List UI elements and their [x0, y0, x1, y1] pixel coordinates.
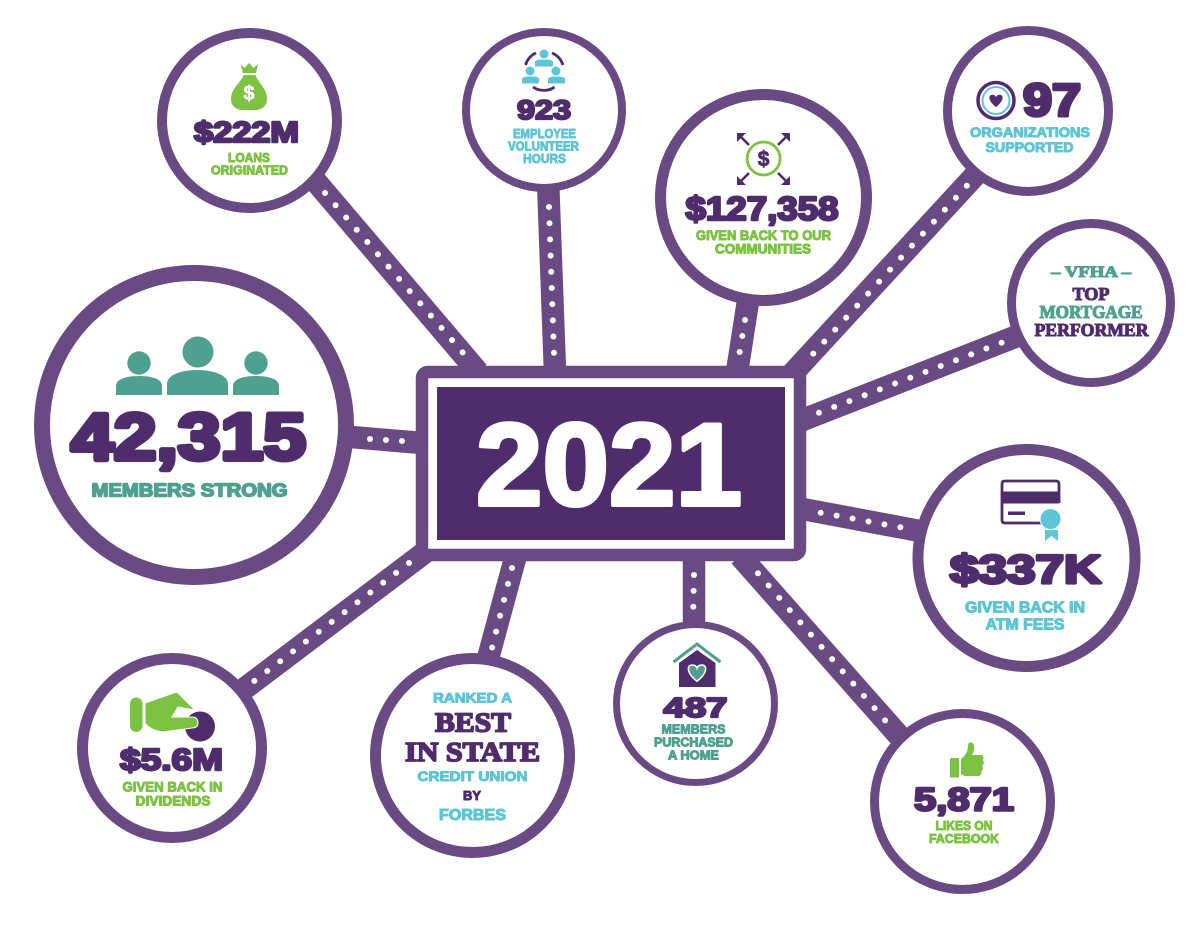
stat label: DIVIDENDS — [136, 794, 210, 808]
icon: dollar with arrows: $ — [758, 148, 770, 171]
connector: forbes — [487, 555, 516, 662]
connector: members — [345, 436, 422, 443]
stat label: A HOME — [668, 748, 719, 762]
icon: dollar with arrows — [0, 0, 790, 185]
icon: people circle — [522, 50, 565, 90]
stat label: LIKES ON — [936, 818, 992, 833]
stat number: 42,315 — [71, 400, 306, 474]
connector: facebook — [740, 556, 908, 746]
icon: card with ribbon — [1002, 481, 1061, 541]
award text: IN STATE — [405, 737, 540, 767]
stat label — [508, 127, 579, 166]
panel: given back to communities — [0, 0, 866, 300]
stat label: COMMUNITIES — [715, 242, 811, 256]
award text — [405, 690, 540, 824]
central year panel — [422, 372, 800, 555]
award text — [1034, 264, 1149, 340]
stat number: $5.6M — [120, 742, 223, 777]
icon: house with heart — [674, 644, 720, 687]
stat label: MEMBERS — [662, 722, 726, 736]
stat number: $127,358 — [686, 190, 838, 227]
icon: money bag: $ — [243, 83, 255, 105]
award text: CREDIT UNION — [418, 768, 528, 784]
stat label — [122, 780, 222, 808]
award text: BEST — [435, 708, 511, 738]
panel: dividends — [82, 658, 262, 838]
panel: vfha top mortgage performer — [1012, 224, 1170, 382]
stat label: ORIGINATED — [211, 162, 288, 178]
award text: MORTGAGE — [1040, 302, 1142, 322]
connector: volunteer hours — [548, 180, 555, 372]
panel: best in state — [376, 658, 570, 852]
stat label — [929, 818, 1000, 846]
panel: members purchased a home — [616, 624, 774, 782]
stat label: SUPPORTED — [986, 139, 1074, 155]
stat label: VOLUNTEER — [508, 140, 579, 154]
award text: BY — [463, 788, 481, 803]
stat label: GIVEN BACK IN — [122, 780, 222, 794]
panel: loans originated — [162, 33, 337, 208]
stat label — [965, 600, 1085, 634]
stat label: GIVEN BACK TO OUR — [696, 228, 831, 243]
stat number: 5,871 — [914, 782, 1014, 818]
award text: RANKED A — [433, 690, 512, 706]
stat number: 97 — [1023, 74, 1081, 126]
stat label — [211, 150, 288, 178]
stat label: EMPLOYEE — [513, 127, 576, 141]
stat number: $222M — [194, 117, 299, 149]
connector: home — [682, 555, 705, 630]
stat label: FACEBOOK — [929, 831, 1000, 846]
stat number: $337K — [950, 548, 1101, 592]
icon: hand with coin — [130, 692, 215, 742]
award text: FORBES — [439, 807, 506, 824]
stat label: MEMBERS STRONG — [92, 480, 288, 500]
connector: dividends — [240, 550, 428, 692]
connector: vfha — [800, 333, 1025, 421]
connector: loans — [312, 177, 478, 372]
stat label — [696, 228, 831, 256]
panel: members strong — [42, 273, 346, 577]
icon: money bag — [231, 63, 267, 110]
stat number: 923 — [517, 95, 571, 125]
connector: given back — [737, 295, 749, 372]
award text: – VFHA – — [1050, 264, 1132, 281]
stat number: 487 — [664, 692, 728, 723]
stat label — [654, 722, 733, 762]
panel: likes on facebook — [874, 714, 1050, 890]
stat label: PURCHASED — [654, 734, 733, 750]
connector: atm fees — [800, 508, 925, 532]
award text: PERFORMER — [1034, 320, 1149, 340]
icon: heart badge — [978, 82, 1014, 118]
stat label: ATM FEES — [986, 616, 1064, 634]
icon: three people — [116, 336, 279, 395]
panel: organizations supported — [948, 30, 1108, 192]
stat label — [970, 124, 1090, 155]
panel: volunteer hours — [466, 32, 622, 188]
year heading: 2021 — [476, 399, 742, 530]
stat label: GIVEN BACK IN — [965, 600, 1085, 616]
connector: organizations — [792, 170, 980, 374]
award text: TOP — [1072, 284, 1110, 304]
stat label: HOURS — [523, 152, 566, 166]
icon: thumbs up — [950, 742, 984, 778]
panel: atm fees — [918, 450, 1135, 666]
stat label: ORGANIZATIONS — [970, 124, 1090, 140]
stat label: LOANS — [228, 150, 270, 165]
